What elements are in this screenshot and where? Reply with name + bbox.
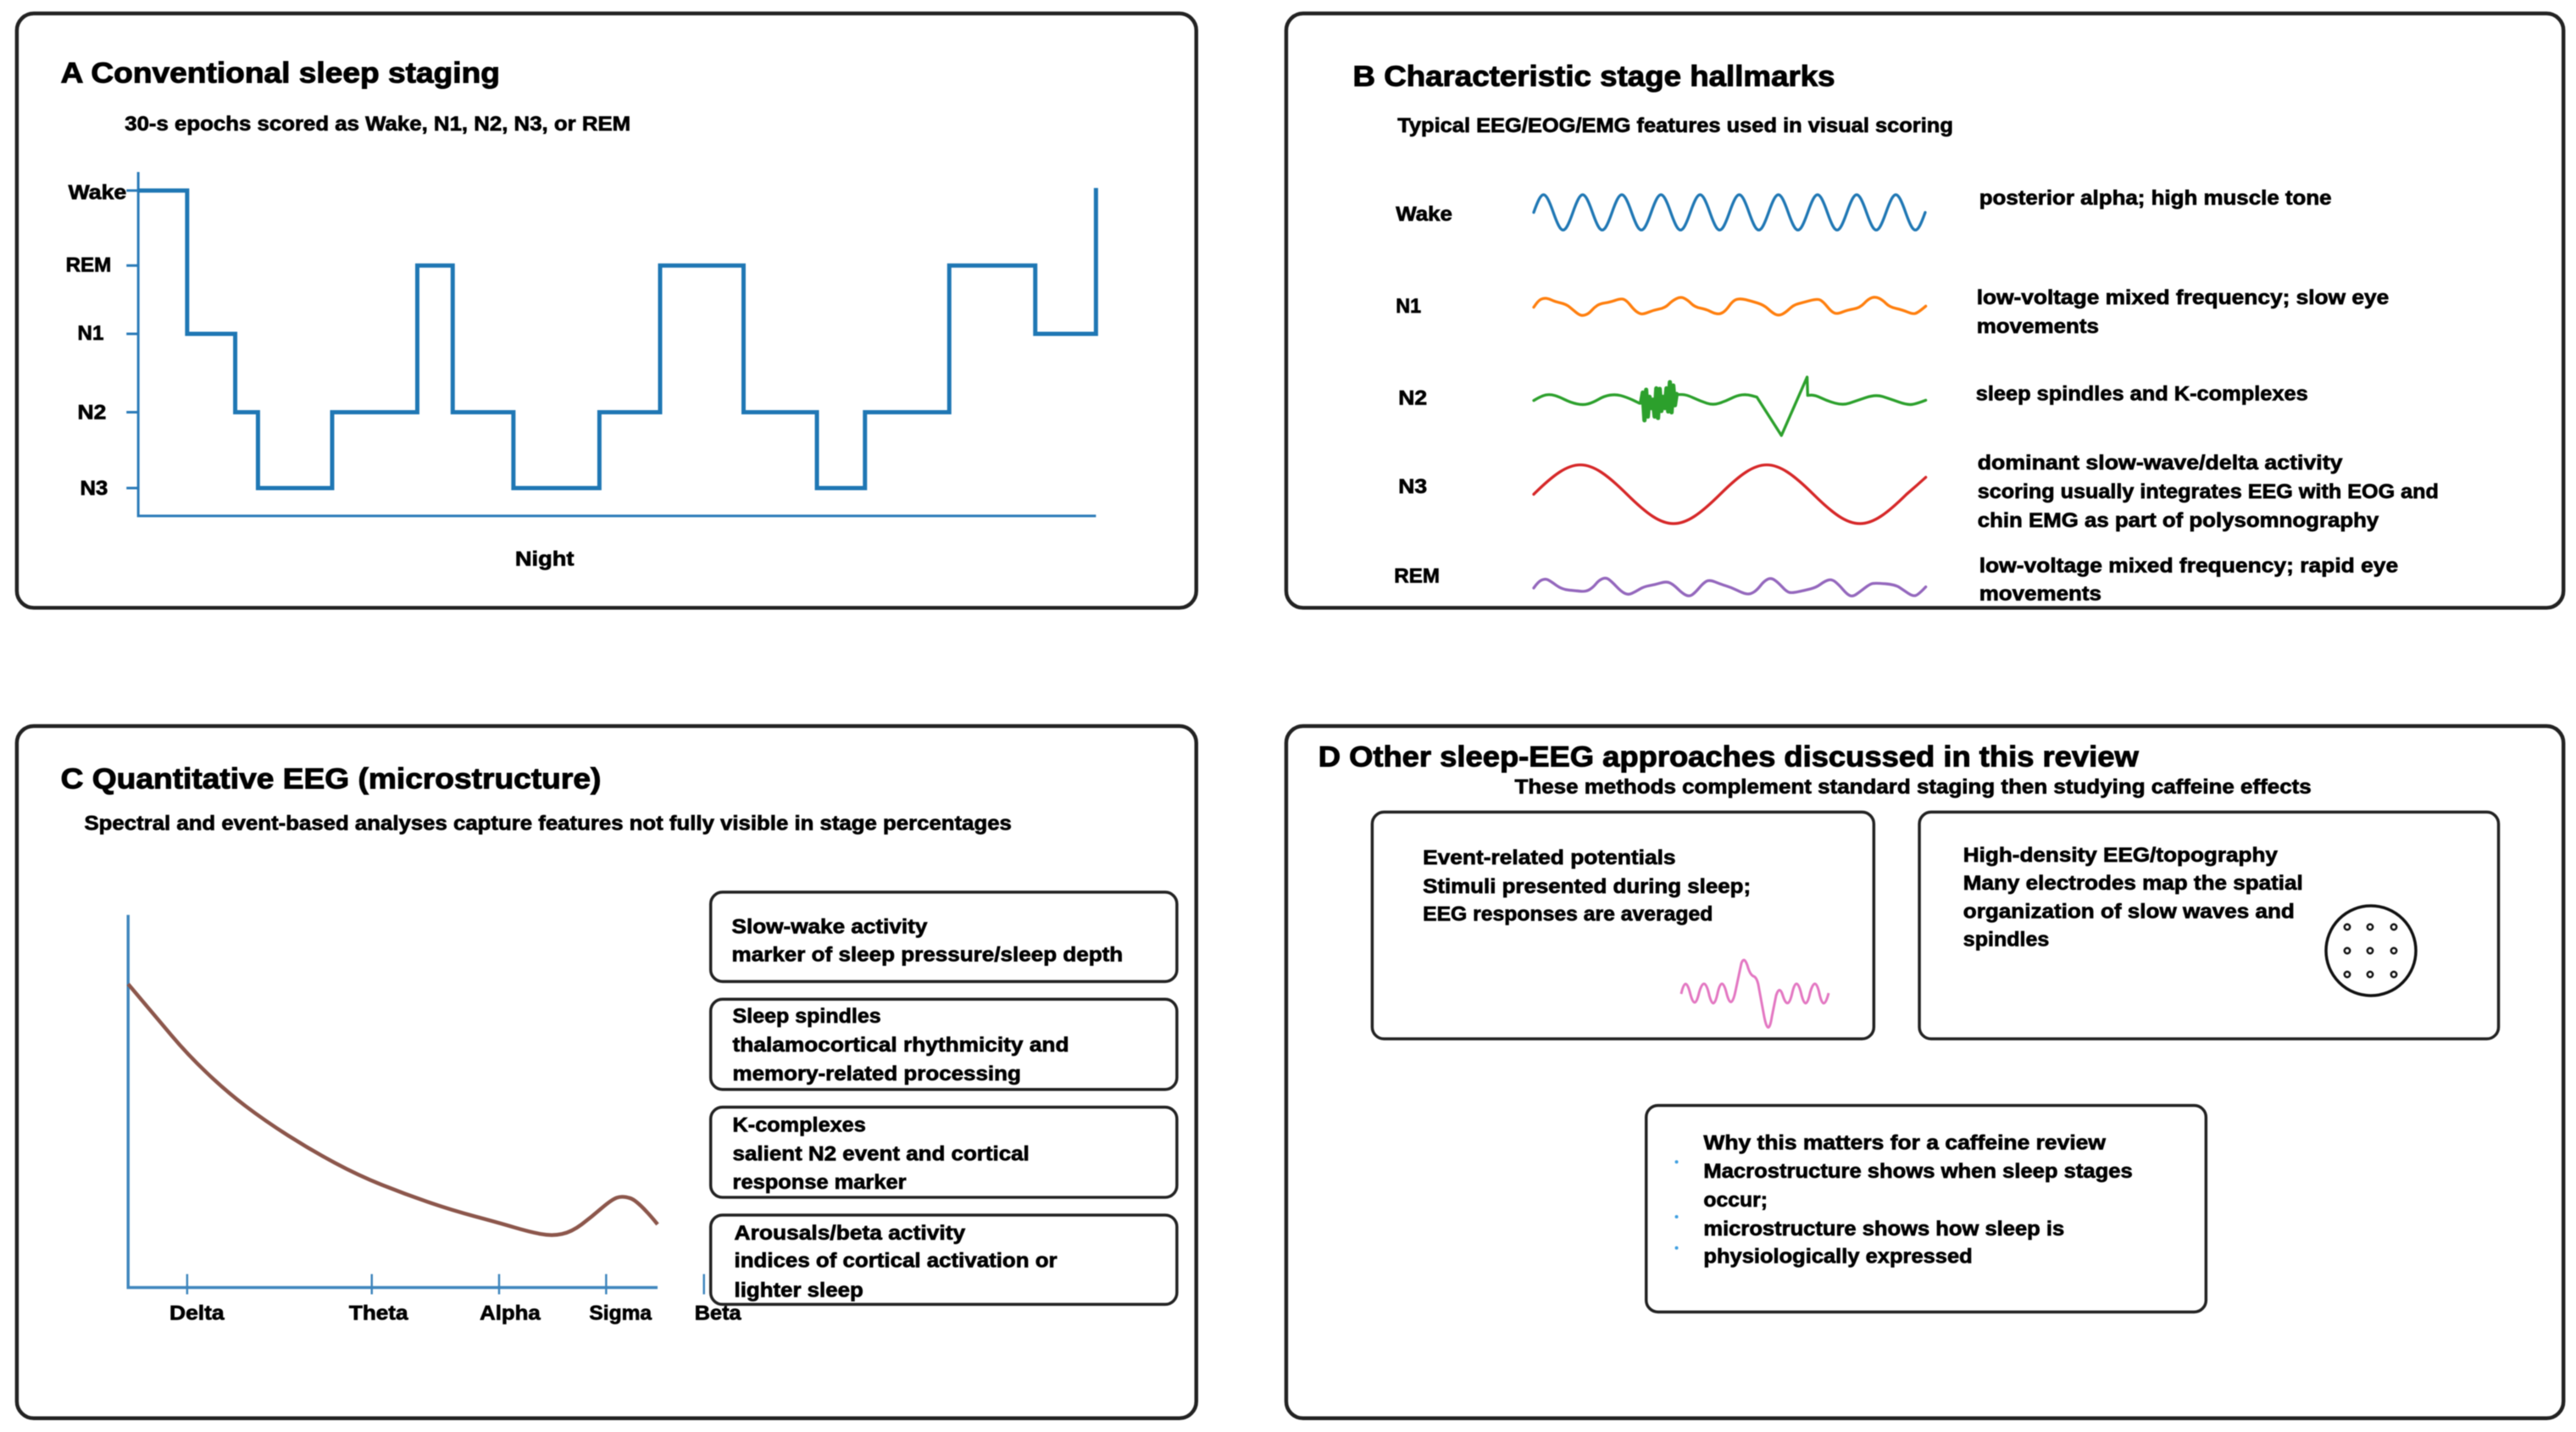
stage row: N1: N1: [1396, 295, 1421, 318]
box: arousals and beta activity: Arousals/beta activity: [735, 1222, 966, 1245]
box: high-density EEG: organization of slow waves and: [1963, 901, 2295, 924]
subtitle A: 30-s epochs scored as Wake, N1, N2, N3, or REM: [125, 113, 630, 136]
heading B: B Characteristic stage hallmarks: [1353, 60, 1835, 92]
hypnogram chart: N1: [78, 322, 103, 345]
hypnogram chart: [66, 172, 1096, 571]
box: high-density EEG: Many electrodes map the spatial: [1963, 872, 2303, 895]
power spectrum chart: Beta: [695, 1302, 741, 1324]
icon: averaged ERP waveform: [1681, 960, 1829, 1028]
subtitle C: Spectral and event-based analyses capture features not fully visible in stage percentages: [84, 812, 1012, 835]
stage row: N3: dominant slow-wave/delta activity: [1978, 452, 2343, 475]
box: slow-wave activity: [711, 892, 1177, 981]
box: arousals and beta activity: indices of cortical activation or: [735, 1250, 1058, 1273]
panel B: characteristic stage hallmarks: [1286, 14, 2563, 608]
box: event-related potentials: EEG responses are averaged: [1423, 903, 1713, 926]
power spectrum chart: Theta: [349, 1302, 408, 1324]
stage row: N2: sleep spindles and K-complexes: [1976, 383, 2308, 406]
stage row: N2: N2: [1398, 387, 1427, 410]
panel A: conventional sleep staging: [17, 14, 1196, 608]
subtitle B: Typical EEG/EOG/EMG features used in visual scoring: [1397, 114, 1953, 137]
box: why this matters: microstructure shows how sleep is: [1703, 1218, 2064, 1241]
power spectrum chart: [128, 915, 741, 1324]
power spectrum chart: Delta: [169, 1302, 225, 1324]
hypnogram chart: Wake: [69, 181, 126, 204]
hypnogram chart: REM: [66, 253, 111, 276]
box: K-complexes: [711, 1107, 1177, 1197]
box: sleep spindles: memory-related processing: [733, 1063, 1021, 1085]
stage row: REM: low-voltage mixed frequency; rapid eye: [1979, 555, 2398, 578]
box: event-related potentials: [1372, 812, 1874, 1039]
hypnogram chart: Night: [515, 548, 575, 571]
box: arousals and beta activity: [711, 1215, 1177, 1304]
power spectrum chart: Alpha: [480, 1302, 541, 1324]
box: sleep spindles: thalamocortical rhythmicity and: [733, 1034, 1069, 1057]
box: slow-wave activity: marker of sleep pressure/sleep depth: [732, 943, 1123, 966]
box: why this matters: [1646, 1106, 2206, 1312]
stage row: REM: movements: [1979, 582, 2101, 605]
box: arousals and beta activity: lighter sleep: [735, 1279, 863, 1302]
stage row: N3: chin EMG as part of polysomnography: [1978, 509, 2379, 532]
hypnogram chart: N3: [80, 477, 108, 500]
box: high-density EEG: [1919, 812, 2499, 1039]
stage row: N3: N3: [1398, 475, 1427, 498]
box: slow-wave activity: Slow-wake activity: [732, 916, 928, 939]
box: sleep spindles: Sleep spindles: [733, 1005, 881, 1028]
panel D: other sleep-EEG approaches: [1286, 726, 2563, 1418]
stage row: Wake: [1396, 187, 2332, 230]
box: event-related potentials: Stimuli presented during sleep;: [1423, 875, 1751, 898]
heading C: C Quantitative EEG (microstructure): [61, 763, 601, 796]
box: K-complexes: response marker: [733, 1171, 907, 1194]
box: sleep spindles: [711, 999, 1177, 1090]
panel C: quantitative EEG: [17, 726, 1196, 1418]
heading D: D Other sleep-EEG approaches discussed in this review: [1319, 741, 2140, 774]
heading A: A Conventional sleep staging: [61, 58, 500, 90]
box: event-related potentials: Event-related potentials: [1423, 846, 1676, 869]
box: high-density EEG: spindles: [1963, 929, 2049, 952]
stage row: N3: [1398, 452, 2439, 532]
stage row: N1: [1396, 286, 2389, 338]
stage row: N1: movements: [1977, 315, 2099, 338]
box: K-complexes: K-complexes: [733, 1113, 866, 1136]
box: K-complexes: salient N2 event and cortical: [733, 1142, 1030, 1165]
box: why this matters: physiologically expressed: [1703, 1246, 1973, 1268]
hypnogram chart: N2: [78, 401, 106, 424]
stage row: REM: REM: [1394, 564, 1440, 587]
stage row: REM: [1394, 555, 2398, 605]
stage row: N3: scoring usually integrates EEG with EOG and: [1978, 480, 2439, 503]
stage row: Wake: Wake: [1396, 203, 1452, 226]
power spectrum chart: Sigma: [589, 1302, 652, 1324]
subtitle D: These methods complement standard staging then studying caffeine effects: [1515, 776, 2312, 799]
stage row: N1: low-voltage mixed frequency; slow eye: [1977, 286, 2389, 309]
box: why this matters: Why this matters for a caffeine review: [1703, 1131, 2106, 1154]
stage row: Wake: posterior alpha; high muscle tone: [1979, 187, 2332, 210]
box: high-density EEG: High-density EEG/topography: [1963, 844, 2279, 867]
stage row: N2: [1398, 377, 2308, 436]
box: why this matters: Macrostructure shows when sleep stages: [1703, 1160, 2133, 1183]
box: why this matters: occur;: [1703, 1189, 1768, 1212]
icon: electrode head map: [2326, 906, 2416, 996]
